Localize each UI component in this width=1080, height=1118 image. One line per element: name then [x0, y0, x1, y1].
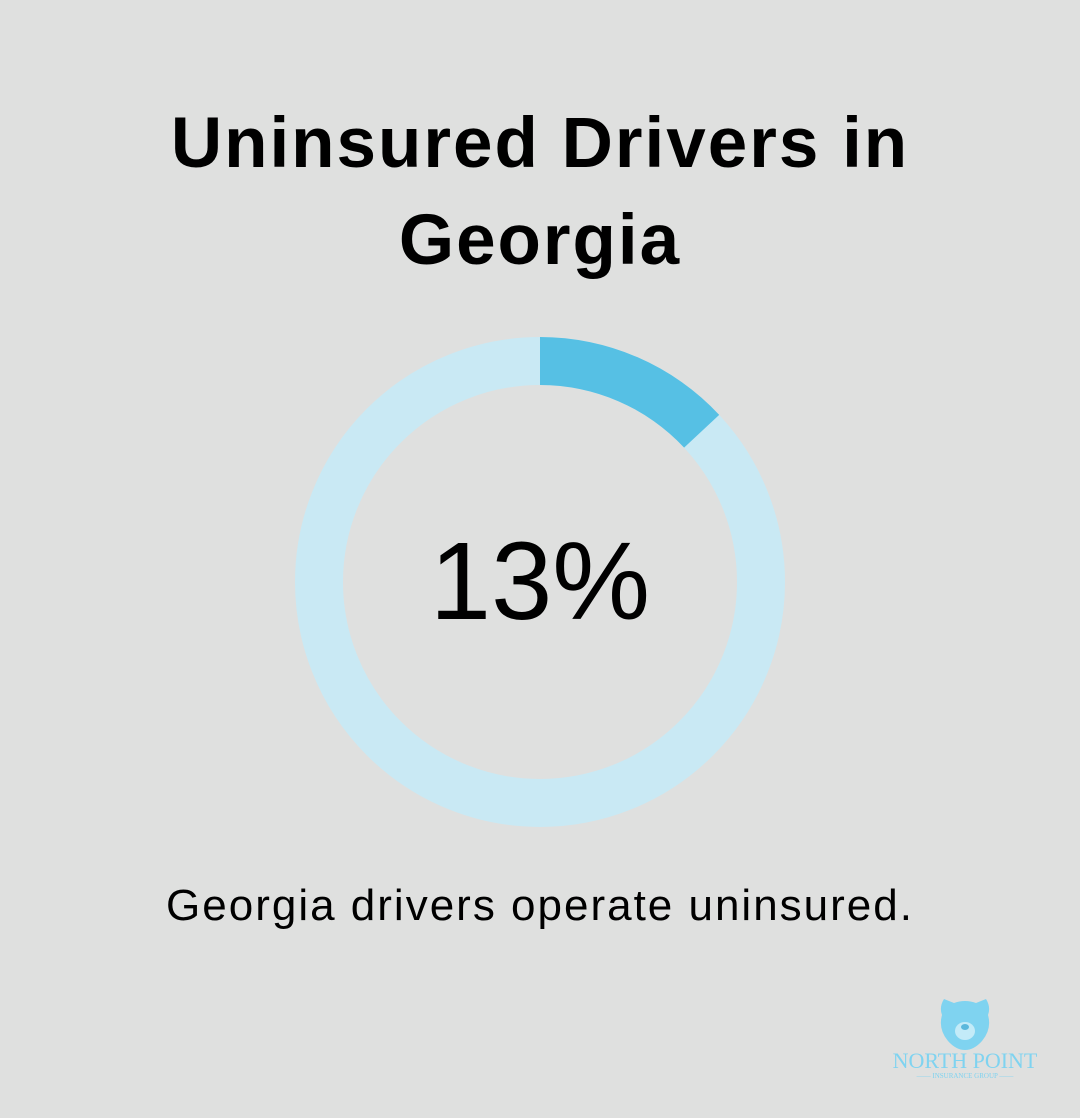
logo: NORTH POINT — [893, 1048, 1037, 1073]
icon: bear — [940, 999, 990, 1050]
center value: 13% — [430, 520, 650, 643]
title — [171, 104, 909, 280]
caption: Georgia drivers operate uninsured. — [166, 881, 914, 930]
logo — [893, 999, 1037, 1080]
title: Georgia — [399, 201, 681, 280]
title: Uninsured Drivers in — [171, 104, 909, 183]
logo: —— INSURANCE GROUP —— — [917, 1072, 1013, 1080]
